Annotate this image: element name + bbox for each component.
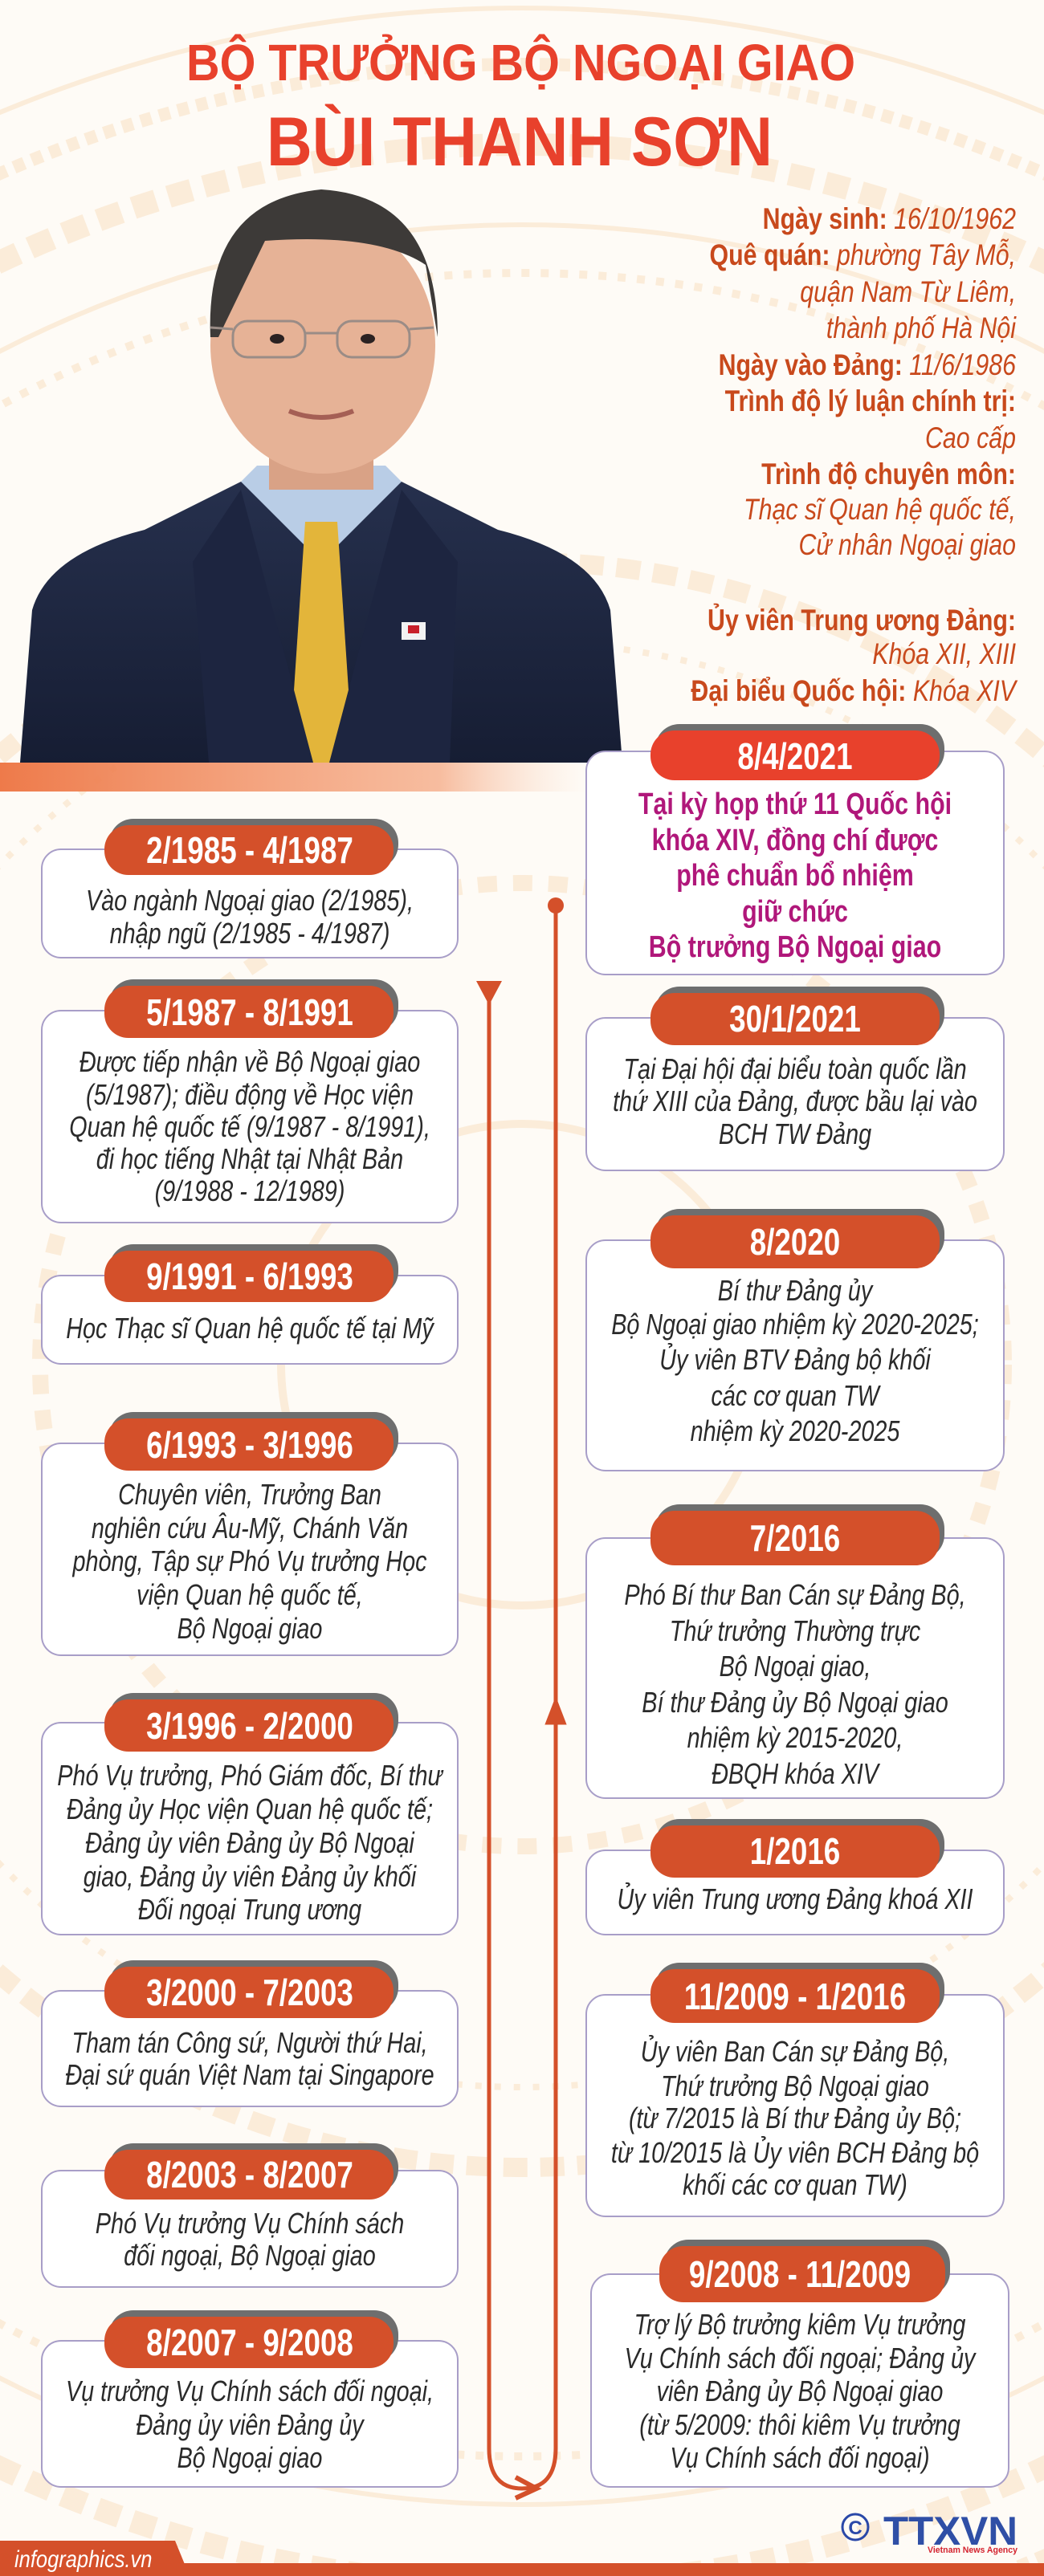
left card: 8/2007 - 9/2008: Bộ Ngoại giao [177, 2441, 322, 2474]
left card: 5/1987 - 8/1991: Được tiếp nhận về Bộ Ngoại giao [80, 1045, 420, 1078]
right card: 9/2008 - 11/2009: 9/2008 - 11/2009 [689, 2253, 911, 2295]
right card: 9/2008 - 11/2009: Vụ Chính sách đối ngoại) [670, 2441, 930, 2474]
left card: 8/2003 - 8/2007: 8/2003 - 8/2007 [146, 2154, 353, 2196]
personal info: Ngày vào Đảng: 11/6/1986 [719, 348, 1016, 382]
personal info: Ngày sinh: 16/10/1962 [763, 202, 1016, 236]
right card: 8/4/2021: phê chuẩn bổ nhiệm [676, 859, 914, 893]
right card: 8/2020: các cơ quan TW [711, 1379, 882, 1412]
left card: 9/1991 - 6/1993: 9/1991 - 6/1993 [146, 1255, 353, 1297]
right card: 1/2016: 1/2016 [750, 1830, 840, 1872]
left card: 5/1987 - 8/1991 [42, 979, 458, 1223]
right card: 11/2009 - 1/2016: 11/2009 - 1/2016 [684, 1976, 906, 2017]
left card: 3/1996 - 2/2000 [42, 1693, 458, 1935]
left card: 5/1987 - 8/1991: Quan hệ quốc tế (9/1987 - 8/1991), [69, 1110, 430, 1143]
right card: 30/1/2021: thứ XIII của Đảng, được bầu lại vào [613, 1085, 977, 1117]
right card: 8/4/2021 [586, 724, 1004, 975]
right card: 11/2009 - 1/2016: Thứ trưởng Bộ Ngoại giao [661, 2069, 929, 2102]
right card: 9/2008 - 11/2009: Vụ Chính sách đối ngoại; Đảng ủy [625, 2342, 977, 2375]
personal info [691, 202, 1018, 708]
right card: 9/2008 - 11/2009 [591, 2240, 1009, 2487]
right card: 8/2020: Bí thư Đảng ủy [718, 1274, 874, 1307]
left card: 2/1985 - 4/1987: 2/1985 - 4/1987 [146, 829, 353, 871]
left card: 3/1996 - 2/2000: Đảng ủy Học viện Quan hệ quốc tế; [67, 1793, 433, 1825]
photo: portrait [20, 189, 622, 763]
right card: 11/2009 - 1/2016: khối các cơ quan TW) [683, 2168, 907, 2201]
personal info: Trình độ lý luận chính trị: [725, 385, 1016, 418]
left card: 3/1996 - 2/2000: giao, Đảng ủy viên Đảng ủy khối [84, 1860, 417, 1893]
personal info: Thạc sĩ Quan hệ quốc tế, [744, 493, 1016, 527]
left card: 8/2007 - 9/2008: Vụ trưởng Vụ Chính sách đối ngoại, [66, 2375, 434, 2407]
personal info: Đại biểu Quốc hội: Khóa XIV [691, 674, 1018, 708]
right card: 8/4/2021: Tại kỳ họp thứ 11 Quốc hội [638, 787, 952, 821]
personal info: Quê quán: phường Tây Mỗ, [710, 238, 1016, 272]
left card: 6/1993 - 3/1996: viện Quan hệ quốc tế, [137, 1578, 363, 1611]
left card: 9/1991 - 6/1993 [42, 1244, 458, 1364]
personal info: Khóa XII, XIII [872, 637, 1017, 671]
left card: 6/1993 - 3/1996 [42, 1412, 458, 1655]
personal info: quận Nam Từ Liêm, [800, 275, 1016, 309]
left card: 8/2007 - 9/2008 [42, 2310, 458, 2487]
logo: TTXVN: C [848, 2517, 863, 2539]
right card: 7/2016: ĐBQH khóa XIV [712, 1757, 881, 1790]
left card: 8/2007 - 9/2008: 8/2007 - 9/2008 [146, 2322, 353, 2363]
right card: 11/2009 - 1/2016: (từ 7/2015 là Bí thư Đảng ủy Bộ; [629, 2102, 961, 2134]
right card: 7/2016: nhiệm kỳ 2015-2020, [687, 1721, 903, 1754]
left card: 8/2003 - 8/2007: Phó Vụ trưởng Vụ Chính sách [96, 2207, 404, 2240]
right card: 8/2020: 8/2020 [750, 1221, 840, 1263]
personal info: Cao cấp [925, 421, 1016, 455]
left card: 5/1987 - 8/1991: (5/1987); điều động về Học viện [86, 1078, 414, 1111]
left card: 2/1985 - 4/1987 [42, 819, 458, 958]
right card: 30/1/2021: BCH TW Đảng [719, 1117, 871, 1150]
right card: 7/2016: Bí thư Đảng ủy Bộ Ngoại giao [642, 1686, 948, 1719]
logo: TTXVN: Vietnam News Agency [928, 2545, 1018, 2555]
right card: 9/2008 - 11/2009: Trợ lý Bộ trưởng kiêm Vụ trưởng [634, 2308, 965, 2341]
title [186, 33, 855, 181]
footer bar [0, 2541, 1044, 2576]
left card: 6/1993 - 3/1996: 6/1993 - 3/1996 [146, 1424, 353, 1466]
right card: 1/2016: Ủy viên Trung ương Đảng khoá XII [617, 1882, 973, 1915]
right card: 8/2020: nhiệm kỳ 2020-2025 [691, 1414, 900, 1447]
right card: 30/1/2021 [586, 987, 1004, 1170]
timeline line with arrows [476, 897, 564, 2498]
left card: 6/1993 - 3/1996: phòng, Tập sự Phó Vụ trưởng Học [72, 1544, 427, 1577]
personal info: thành phố Hà Nội [826, 311, 1017, 345]
left card: 8/2007 - 9/2008: Đảng ủy viên Đảng ủy [136, 2408, 365, 2441]
right card: 30/1/2021: 30/1/2021 [729, 998, 861, 1040]
footer bar: infographics.vn [14, 2545, 152, 2572]
title: BỘ TRƯỞNG BỘ NGOẠI GIAO [186, 33, 855, 92]
right card: 7/2016 [586, 1504, 1004, 1798]
left card: 3/1996 - 2/2000: Phó Vụ trưởng, Phó Giám đốc, Bí thư [57, 1759, 444, 1792]
logo: TTXVN: TTXVN [883, 2509, 1017, 2554]
left card: 2/1985 - 4/1987: Vào ngành Ngoại giao (2/1985), [86, 884, 414, 917]
left card: 3/1996 - 2/2000: 3/1996 - 2/2000 [146, 1705, 353, 1747]
right card: 7/2016: Phó Bí thư Ban Cán sự Đảng Bộ, [624, 1578, 966, 1611]
left card: 3/1996 - 2/2000: Đảng ủy viên Đảng ủy Bộ Ngoại [85, 1826, 414, 1859]
right card: 8/4/2021: Bộ trưởng Bộ Ngoại giao [649, 930, 941, 964]
left card: 5/1987 - 8/1991: 5/1987 - 8/1991 [146, 991, 353, 1033]
left card: 3/2000 - 7/2003: 3/2000 - 7/2003 [146, 1972, 353, 2013]
left card: 9/1991 - 6/1993: Học Thạc sĩ Quan hệ quốc tế tại Mỹ [66, 1312, 434, 1345]
right card: 9/2008 - 11/2009: (từ 5/2009: thôi kiêm Vụ trưởng [639, 2408, 960, 2441]
left card: 5/1987 - 8/1991: (9/1988 - 12/1989) [155, 1174, 345, 1207]
right card: 8/2020: Ủy viên BTV Đảng bộ khối [659, 1342, 931, 1376]
left card: 3/2000 - 7/2003: Tham tán Công sứ, Người thứ Hai, [71, 2026, 428, 2059]
left card: 3/2000 - 7/2003 [42, 1960, 458, 2106]
personal info: Cử nhân Ngoại giao [798, 528, 1016, 562]
right card: 8/2020: Bộ Ngoại giao nhiệm kỳ 2020-2025; [611, 1308, 979, 1341]
right card: 9/2008 - 11/2009: viên Đảng ủy Bộ Ngoại giao [657, 2375, 943, 2407]
right card: 11/2009 - 1/2016: từ 10/2015 là Ủy viên BCH Đảng bộ [611, 2135, 979, 2169]
right card: 8/4/2021: 8/4/2021 [737, 735, 853, 777]
right card: 7/2016: Bộ Ngoại giao, [720, 1650, 871, 1683]
left card: 6/1993 - 3/1996: nghiên cứu Âu-Mỹ, Chánh Văn [92, 1512, 408, 1544]
personal info: Trình độ chuyên môn: [761, 458, 1016, 491]
right card: 11/2009 - 1/2016: Ủy viên Ban Cán sự Đảng Bộ, [641, 2034, 949, 2068]
left card: 8/2003 - 8/2007 [42, 2143, 458, 2287]
left card: 2/1985 - 4/1987: nhập ngũ (2/1985 - 4/1987) [110, 917, 389, 950]
right card: 8/2020 [586, 1209, 1004, 1471]
right card: 7/2016: 7/2016 [750, 1517, 840, 1559]
left card: 6/1993 - 3/1996: Chuyên viên, Trưởng Ban [118, 1478, 381, 1511]
title: BÙI THANH SƠN [267, 104, 773, 181]
left card: 3/2000 - 7/2003: Đại sứ quán Việt Nam tại Singapore [65, 2058, 434, 2091]
left card: 6/1993 - 3/1996: Bộ Ngoại giao [177, 1612, 322, 1645]
left card: 5/1987 - 8/1991: đi học tiếng Nhật tại Nhật Bản [96, 1142, 403, 1175]
orange bar under photo [0, 763, 586, 792]
right card: 11/2009 - 1/2016 [586, 1963, 1004, 2216]
right card: 1/2016 [586, 1819, 1004, 1935]
right card: 8/4/2021: khóa XIV, đồng chí được [652, 824, 938, 857]
right card: 7/2016: Thứ trưởng Thường trực [670, 1614, 920, 1647]
right card: 8/4/2021: giữ chức [742, 895, 848, 929]
left card: 8/2003 - 8/2007: đối ngoại, Bộ Ngoại giao [124, 2239, 376, 2272]
left card: 3/1996 - 2/2000: Đối ngoại Trung ương [138, 1893, 361, 1926]
personal info: Ủy viên Trung ương Đảng: [708, 604, 1016, 637]
right card: 30/1/2021: Tại Đại hội đại biểu toàn quốc lần [623, 1052, 967, 1085]
